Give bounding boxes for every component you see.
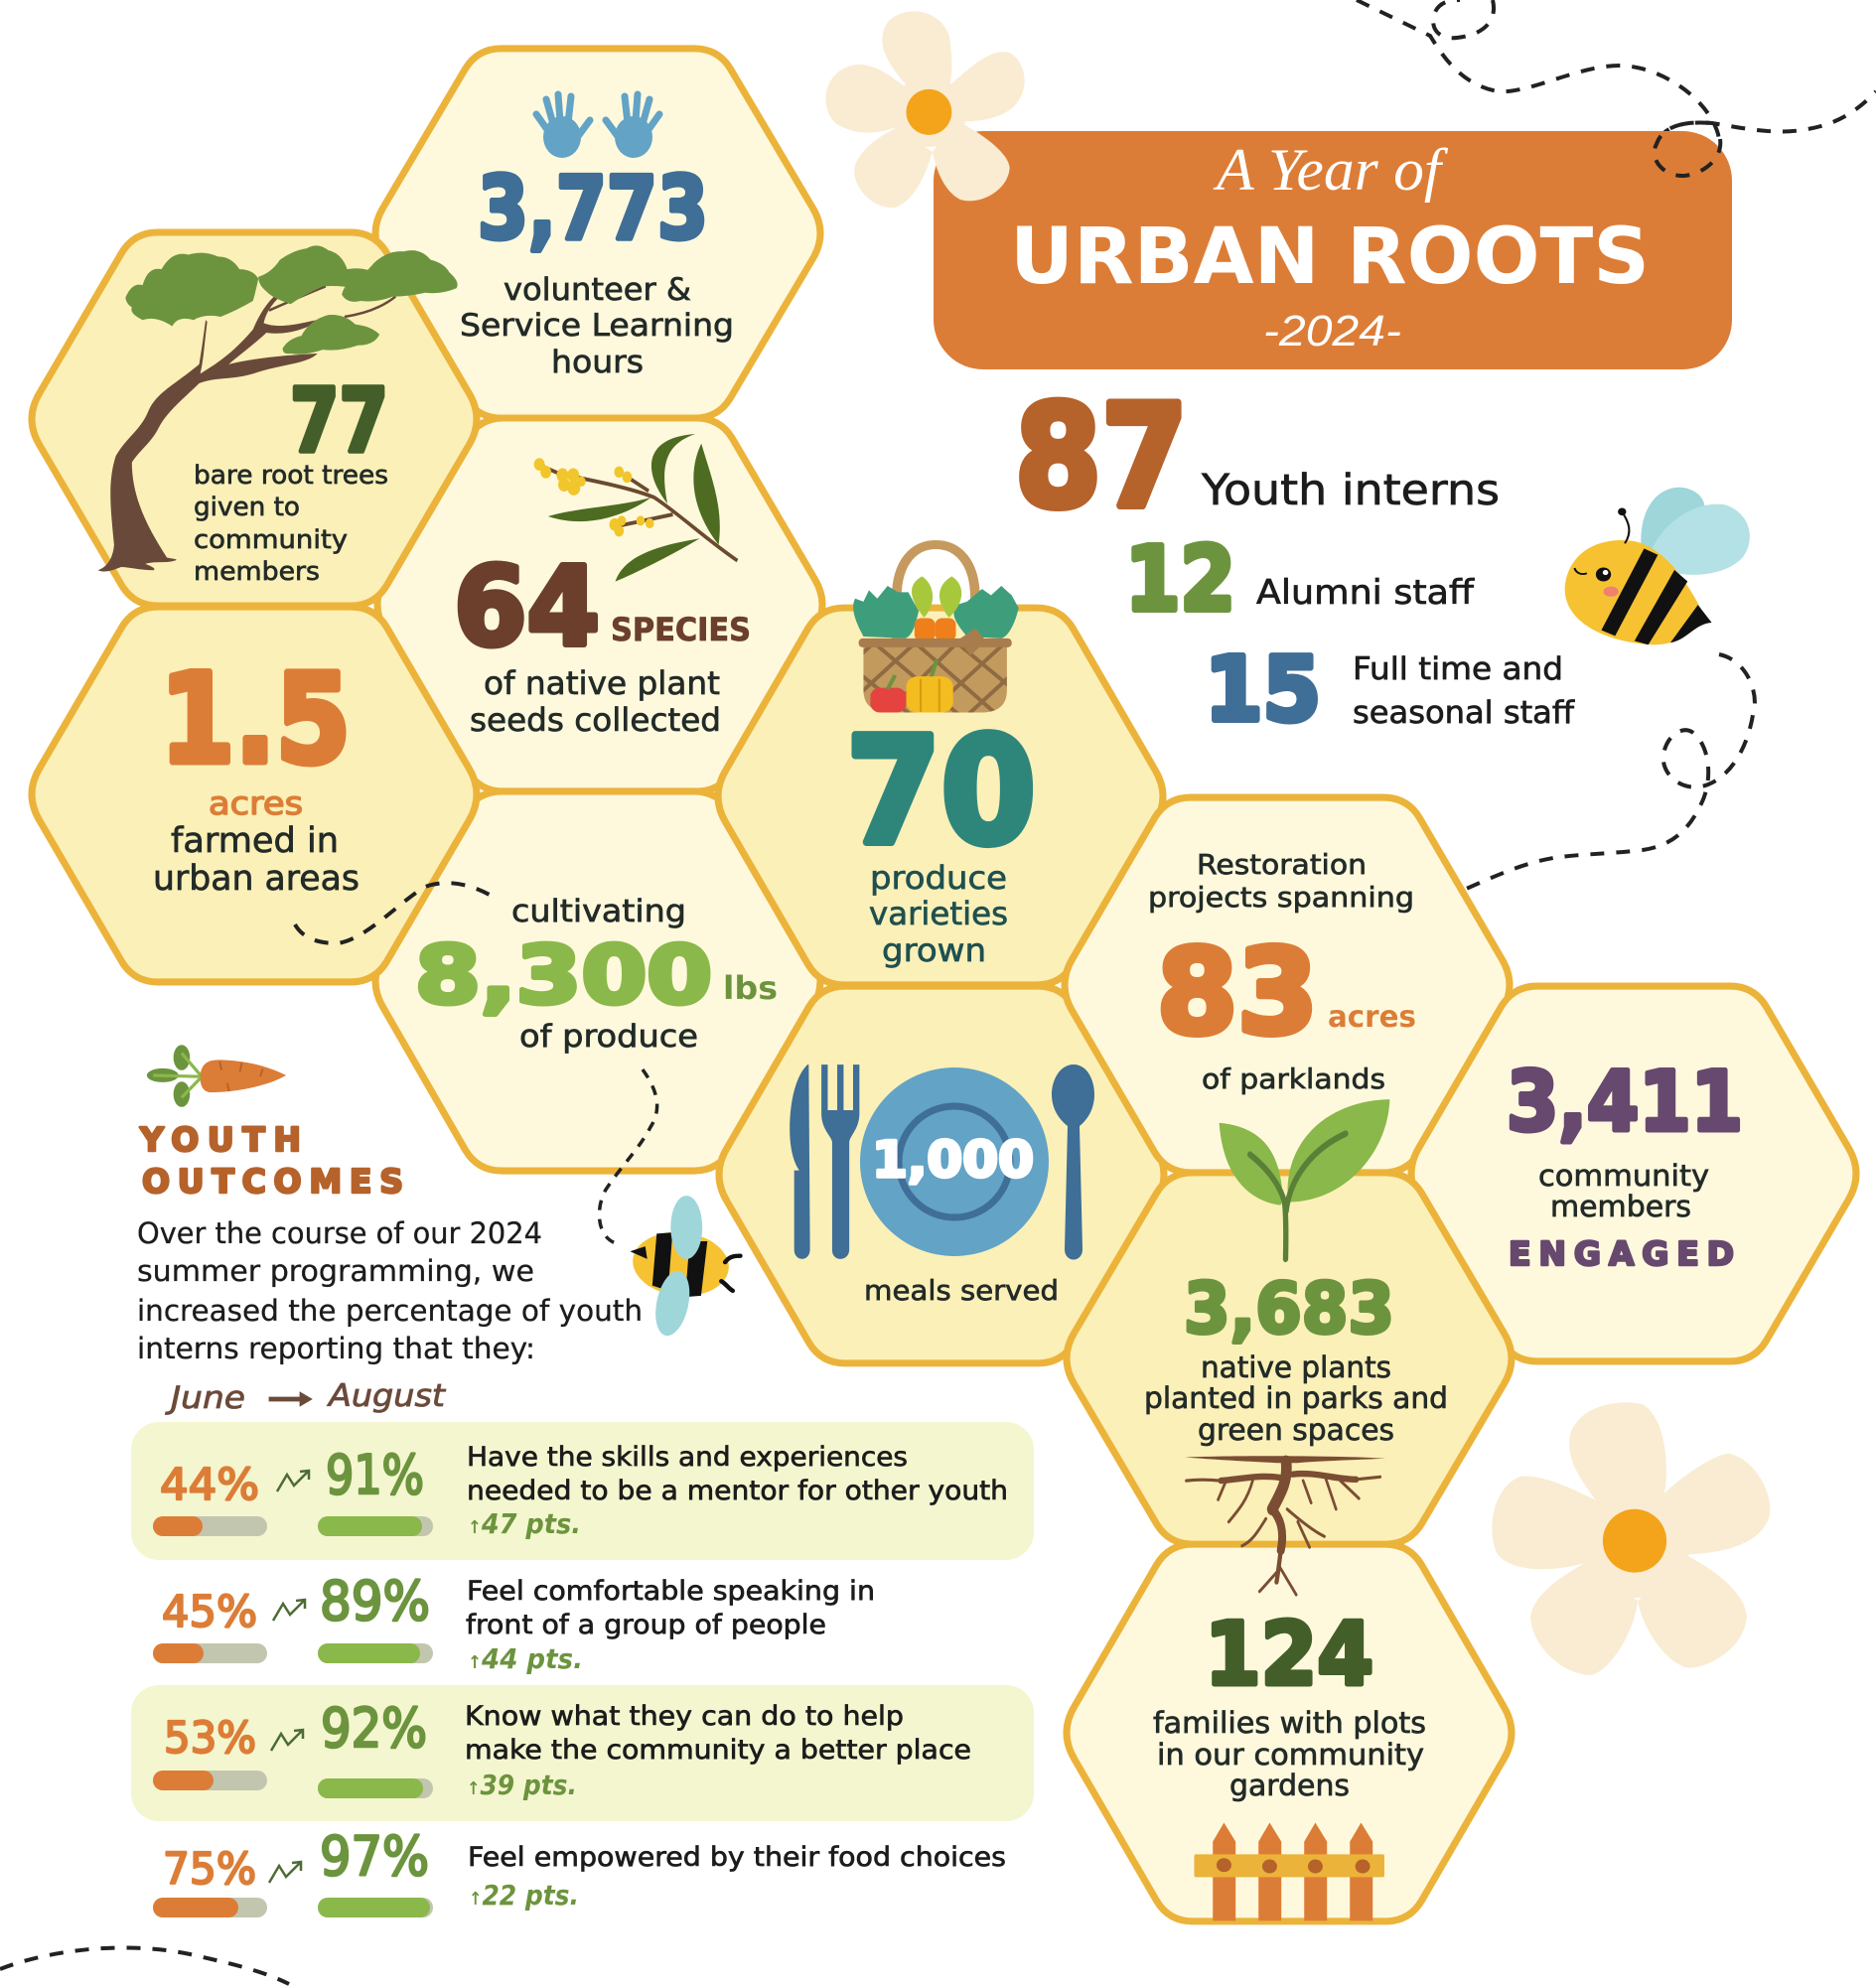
decorative bee trail: small bee — [599, 1069, 657, 1243]
icon: plate — [860, 1067, 1049, 1256]
text: community — [465, 1701, 971, 1766]
icon: blue hands — [536, 94, 659, 158]
text: intro paragraph: Over the course of our 2024 — [137, 1216, 542, 1250]
stat: 15: 15 — [1205, 638, 1321, 741]
text: volunteer hours label: Service Learning — [460, 308, 734, 344]
text: trees label: given to — [194, 493, 300, 522]
text: community: Know what they can do to help — [465, 1701, 904, 1732]
stat: June 44%: 44% — [160, 1460, 259, 1510]
title: year: -2024- — [1263, 307, 1401, 355]
text: farmed label: urban areas — [153, 859, 360, 899]
text: families label — [1153, 1706, 1426, 1802]
text: speaking: front of a group of people — [466, 1610, 826, 1640]
label: acres: acres — [209, 784, 303, 822]
text: trees label: community — [194, 525, 348, 555]
stat: June 53%: 53% — [164, 1713, 256, 1764]
row: better community — [131, 1685, 1034, 1821]
text: restoration label — [1148, 848, 1414, 914]
panel: native plant species — [377, 418, 822, 791]
text: families label: in our community — [1157, 1738, 1424, 1772]
text: varieties label: grown — [882, 931, 986, 969]
decorative bee trail: bottom left — [0, 1947, 289, 1984]
stat: June 75%: 75% — [163, 1844, 256, 1895]
text: youth interns: Youth interns — [1201, 466, 1500, 515]
title: urban roots: URBAN ROOTS — [1010, 213, 1650, 302]
text: seeds label: seeds collected — [470, 701, 721, 739]
text: full time staff — [1353, 651, 1575, 731]
banner loop trail — [1655, 122, 1720, 176]
text: mentor skills: needed to be a mentor for other youth — [467, 1476, 1008, 1506]
text: points gained: ↑39 pts. — [467, 1769, 577, 1801]
text: of produce: of produce — [519, 1019, 698, 1055]
bar: June 45 — [153, 1643, 267, 1663]
text: families label: families with plots — [1153, 1706, 1426, 1740]
bar: August 92 — [318, 1778, 433, 1798]
stat: 83: 83 — [1157, 923, 1318, 1061]
title: a year of: A Year of — [1213, 137, 1449, 203]
text: families label: gardens — [1229, 1769, 1350, 1802]
panel: native plants planted — [1067, 1099, 1512, 1595]
panel: produce weight — [375, 791, 820, 1171]
text: speaking — [466, 1576, 875, 1640]
heading: youth outcomes: OUTCOMES — [142, 1162, 403, 1201]
panel: bare root trees — [32, 232, 477, 606]
legend: June to August: June — [164, 1380, 245, 1416]
text: of parklands: of parklands — [1202, 1063, 1385, 1095]
text: speaking: Feel comfortable speaking in — [467, 1576, 875, 1607]
panel: community gardens — [1067, 1544, 1512, 1921]
text: restoration label: projects spanning — [1148, 881, 1414, 914]
text: cultivating: cultivating — [511, 894, 686, 929]
stat: August 97%: 97% — [320, 1825, 429, 1888]
icon: trend arrow — [269, 1862, 301, 1883]
stat: August 91%: 91% — [326, 1444, 424, 1506]
stat: 8,300: 8,300 — [415, 929, 712, 1022]
text: community members — [1538, 1159, 1709, 1223]
decorative bee trail: across acres hex — [295, 883, 495, 943]
text: volunteer hours label — [460, 272, 734, 380]
icon: top flower — [825, 11, 1025, 208]
icon: trend arrow — [271, 1730, 303, 1751]
label: species: SPECIES — [611, 611, 751, 648]
icon: seedling — [1220, 1099, 1389, 1259]
legend: June to August — [164, 1378, 447, 1416]
stat: 12: 12 — [1125, 527, 1235, 631]
stat: 3,773: 3,773 — [478, 158, 708, 259]
text: points gained: ↑44 pts. — [468, 1642, 583, 1675]
bar: June 53 — [153, 1771, 267, 1790]
text: intro paragraph: interns reporting that they: — [137, 1332, 535, 1365]
panel: community members engaged — [1411, 986, 1856, 1361]
text: trees label: members — [194, 557, 320, 587]
row: public speaking — [153, 1570, 875, 1675]
text: varieties label: varieties — [869, 895, 1008, 932]
text: alumni staff: Alumni staff — [1256, 573, 1476, 613]
text: native plants label — [1144, 1350, 1448, 1447]
icon: carrot — [147, 1045, 286, 1107]
text: native plants label: native plants — [1201, 1350, 1391, 1384]
stat: 3,411: 3,411 — [1507, 1054, 1743, 1150]
bar: August 91 — [318, 1516, 433, 1536]
text: points gained: ↑47 pts. — [468, 1507, 581, 1540]
title banner — [934, 131, 1732, 369]
text: farmed label: farmed in — [171, 821, 339, 861]
icon: roots — [1185, 1456, 1385, 1595]
text: intro paragraph: increased the percentage of youth — [137, 1294, 643, 1328]
text: intro paragraph — [137, 1216, 643, 1365]
heading: youth outcomes: YOUTH — [139, 1120, 301, 1159]
decorative bee trail: top right — [1357, 0, 1876, 176]
stat: 77: 77 — [290, 369, 388, 472]
bar: August 97 — [318, 1898, 433, 1917]
stat: August 89%: 89% — [320, 1570, 430, 1632]
icon: flowering branch — [534, 434, 738, 582]
text: native plants label: planted in parks and — [1144, 1381, 1448, 1415]
icon: small bee — [630, 1196, 740, 1339]
text: native plants label: green spaces — [1198, 1413, 1394, 1447]
text: food choices: Feel empowered by their food choices — [468, 1842, 1006, 1873]
bar: June 75 — [153, 1898, 267, 1917]
panel: produce varieties — [718, 545, 1163, 985]
panel: restoration projects — [1065, 797, 1510, 1173]
icon: vegetable basket — [853, 545, 1022, 716]
label: engaged: ENGAGED — [1509, 1234, 1734, 1273]
row: mentor skills — [131, 1422, 1034, 1560]
icon: trend arrow — [277, 1471, 309, 1491]
text: farmed label — [153, 821, 360, 899]
icon: spoon — [1052, 1064, 1094, 1259]
stat: 1.5: 1.5 — [160, 648, 351, 791]
text: community members: community — [1538, 1159, 1709, 1193]
stat: 64: 64 — [454, 543, 600, 670]
text: trees label: bare root trees — [194, 461, 388, 491]
text: trees label — [194, 461, 388, 587]
panel: volunteer hours — [375, 49, 820, 418]
heading: youth outcomes — [139, 1120, 403, 1201]
text: restoration label: Restoration — [1197, 848, 1367, 881]
text: full time staff: Full time and — [1353, 651, 1563, 687]
label: acres: acres — [1328, 1000, 1416, 1035]
legend: June to August: August — [327, 1378, 447, 1414]
row: food choices — [153, 1825, 1006, 1917]
stat: June 45%: 45% — [162, 1587, 257, 1637]
icon: big bee — [1565, 488, 1750, 644]
staff stats — [1015, 375, 1575, 741]
text: mentor skills — [467, 1442, 1008, 1506]
bar: June 44 — [153, 1516, 267, 1536]
text: intro paragraph: summer programming, we — [137, 1254, 534, 1288]
panel: meals served — [719, 986, 1164, 1363]
icon: trend arrow — [273, 1600, 305, 1621]
icon: fence — [1194, 1823, 1384, 1920]
text: points gained: ↑22 pts. — [469, 1879, 579, 1912]
stat: 70: 70 — [846, 706, 1036, 877]
icon: windswept tree — [98, 245, 458, 572]
text: meals served: meals served — [864, 1274, 1059, 1307]
text: volunteer hours label: volunteer & — [504, 272, 691, 308]
panel: acres farmed — [32, 607, 477, 982]
text: full time staff: seasonal staff — [1353, 695, 1575, 731]
text: community members: members — [1550, 1190, 1691, 1223]
icon: bottom flower — [1492, 1402, 1770, 1675]
text: community: make the community a better place — [465, 1735, 971, 1766]
text: volunteer hours label: hours — [551, 345, 644, 380]
stat: August 92%: 92% — [321, 1697, 427, 1760]
bar: August 89 — [318, 1643, 433, 1663]
text: seeds label — [470, 664, 721, 739]
text: varieties label — [869, 859, 1008, 969]
stat: 124: 124 — [1205, 1604, 1373, 1705]
text: varieties label: produce — [870, 859, 1007, 897]
decorative bee trail: right side — [1464, 654, 1755, 890]
stat: 1,000: 1,000 — [872, 1131, 1034, 1189]
text: seeds label: of native plant — [484, 664, 720, 702]
stat: 87: 87 — [1015, 375, 1188, 539]
icon: knife and fork — [790, 1064, 859, 1259]
section: youth outcomes — [137, 1045, 643, 1416]
stat: 3,683: 3,683 — [1184, 1268, 1394, 1349]
label: lbs: lbs — [723, 969, 778, 1007]
text: mentor skills: Have the skills and experiences — [467, 1442, 908, 1473]
